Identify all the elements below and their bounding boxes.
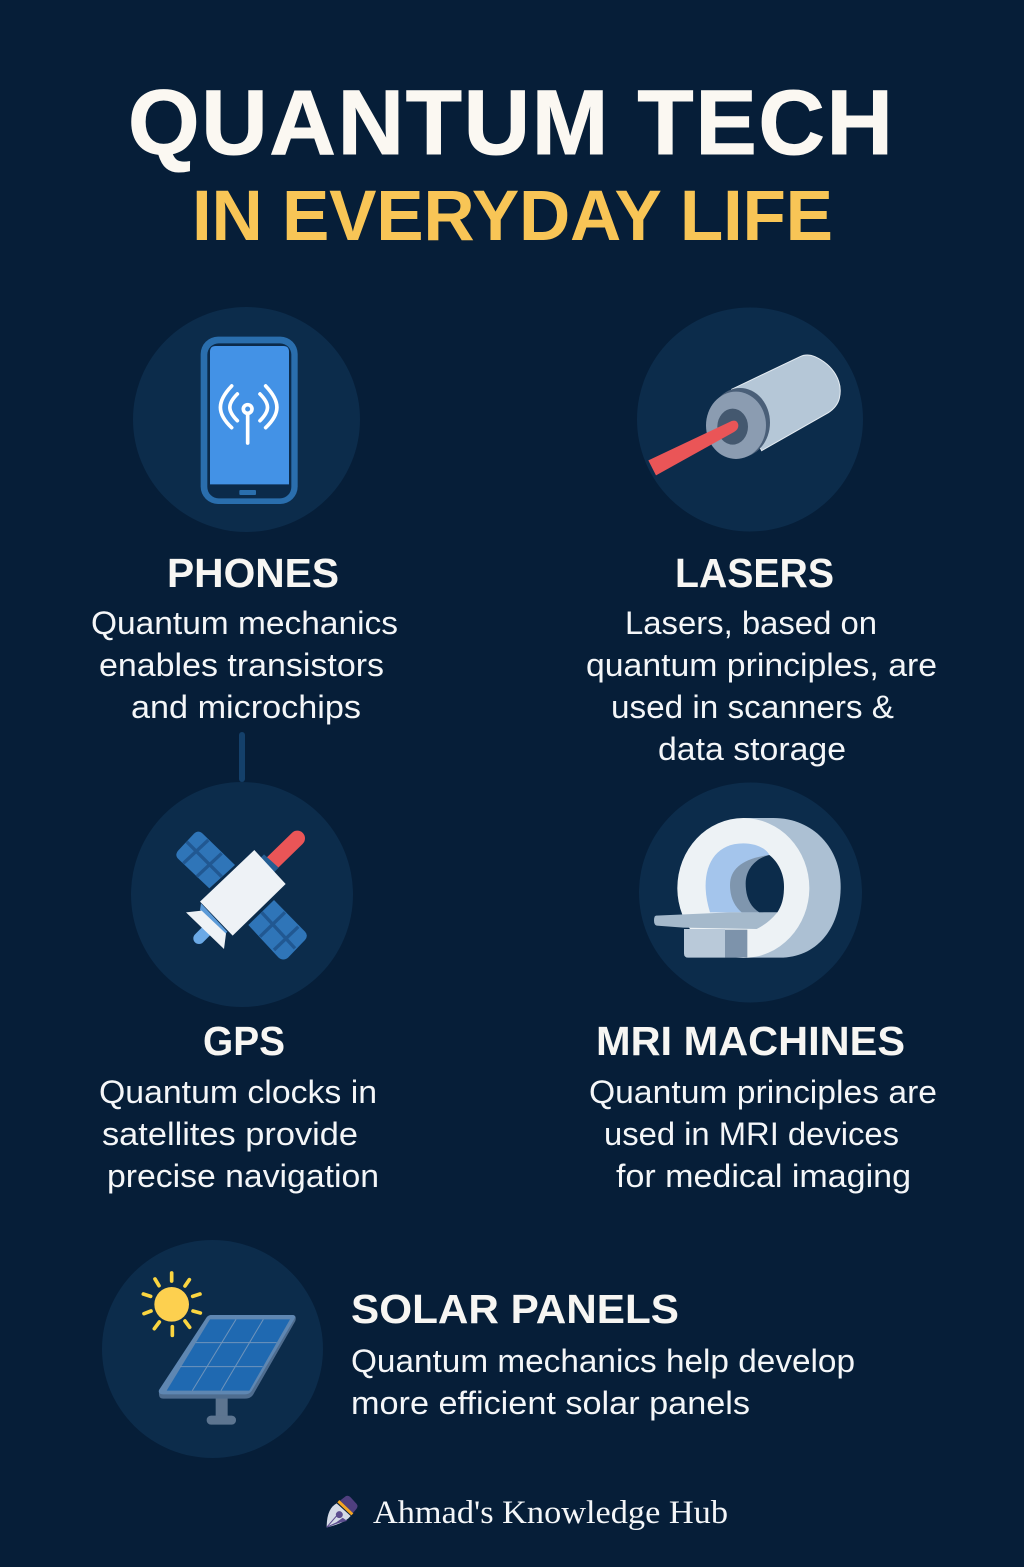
text: lasers description: Lasers, based on [625,605,877,641]
title: IN EVERYDAY LIFE [192,177,833,256]
icon: fountain pen nib [327,1496,358,1527]
text: gps description: satellites provide [102,1116,358,1152]
text: lasers description: quantum principles, are [586,647,937,683]
panel: lasers [586,308,937,767]
title [128,72,893,256]
text: lasers description: used in scanners & [611,689,894,725]
text: phones description: enables transistors [99,647,384,683]
connector line [239,732,245,782]
text: phones description [91,605,398,725]
heading: phones: PHONES [167,550,339,596]
text: lasers description: data storage [658,731,846,767]
footer [327,1495,728,1531]
panel: mri machines [589,782,937,1194]
icon: mri scanner [639,782,862,1002]
icon: laser [637,308,863,532]
brand name: Ahmad's Knowledge Hub [373,1495,728,1531]
icon: phone [133,307,360,532]
text: mri description: Quantum principles are [589,1074,937,1110]
text: lasers description [586,605,937,767]
panel: phones [91,307,398,725]
text: mri description: for medical imaging [616,1158,911,1194]
text: mri description [589,1074,937,1194]
heading: gps: GPS [203,1018,285,1064]
panel: solar panels [102,1240,855,1458]
icon: solar panel and sun [102,1240,323,1458]
text: gps description: Quantum clocks in [99,1074,377,1110]
heading: solar panels: SOLAR PANELS [351,1286,679,1332]
text: mri description: used in MRI devices [604,1116,899,1152]
icon: satellite [131,782,353,1007]
heading: lasers: LASERS [675,550,834,596]
text: gps description: precise navigation [107,1158,379,1194]
text: solar description: more efficient solar panels [351,1385,750,1421]
text: solar description: Quantum mechanics help develop [351,1343,855,1379]
text: phones description: Quantum mechanics [91,605,398,641]
text: solar description [351,1343,855,1421]
panel: gps [99,732,379,1194]
text: phones description: and microchips [131,689,361,725]
text: gps description [99,1074,379,1194]
title: QUANTUM TECH [128,72,893,174]
heading: mri machines: MRI MACHINES [596,1018,905,1064]
